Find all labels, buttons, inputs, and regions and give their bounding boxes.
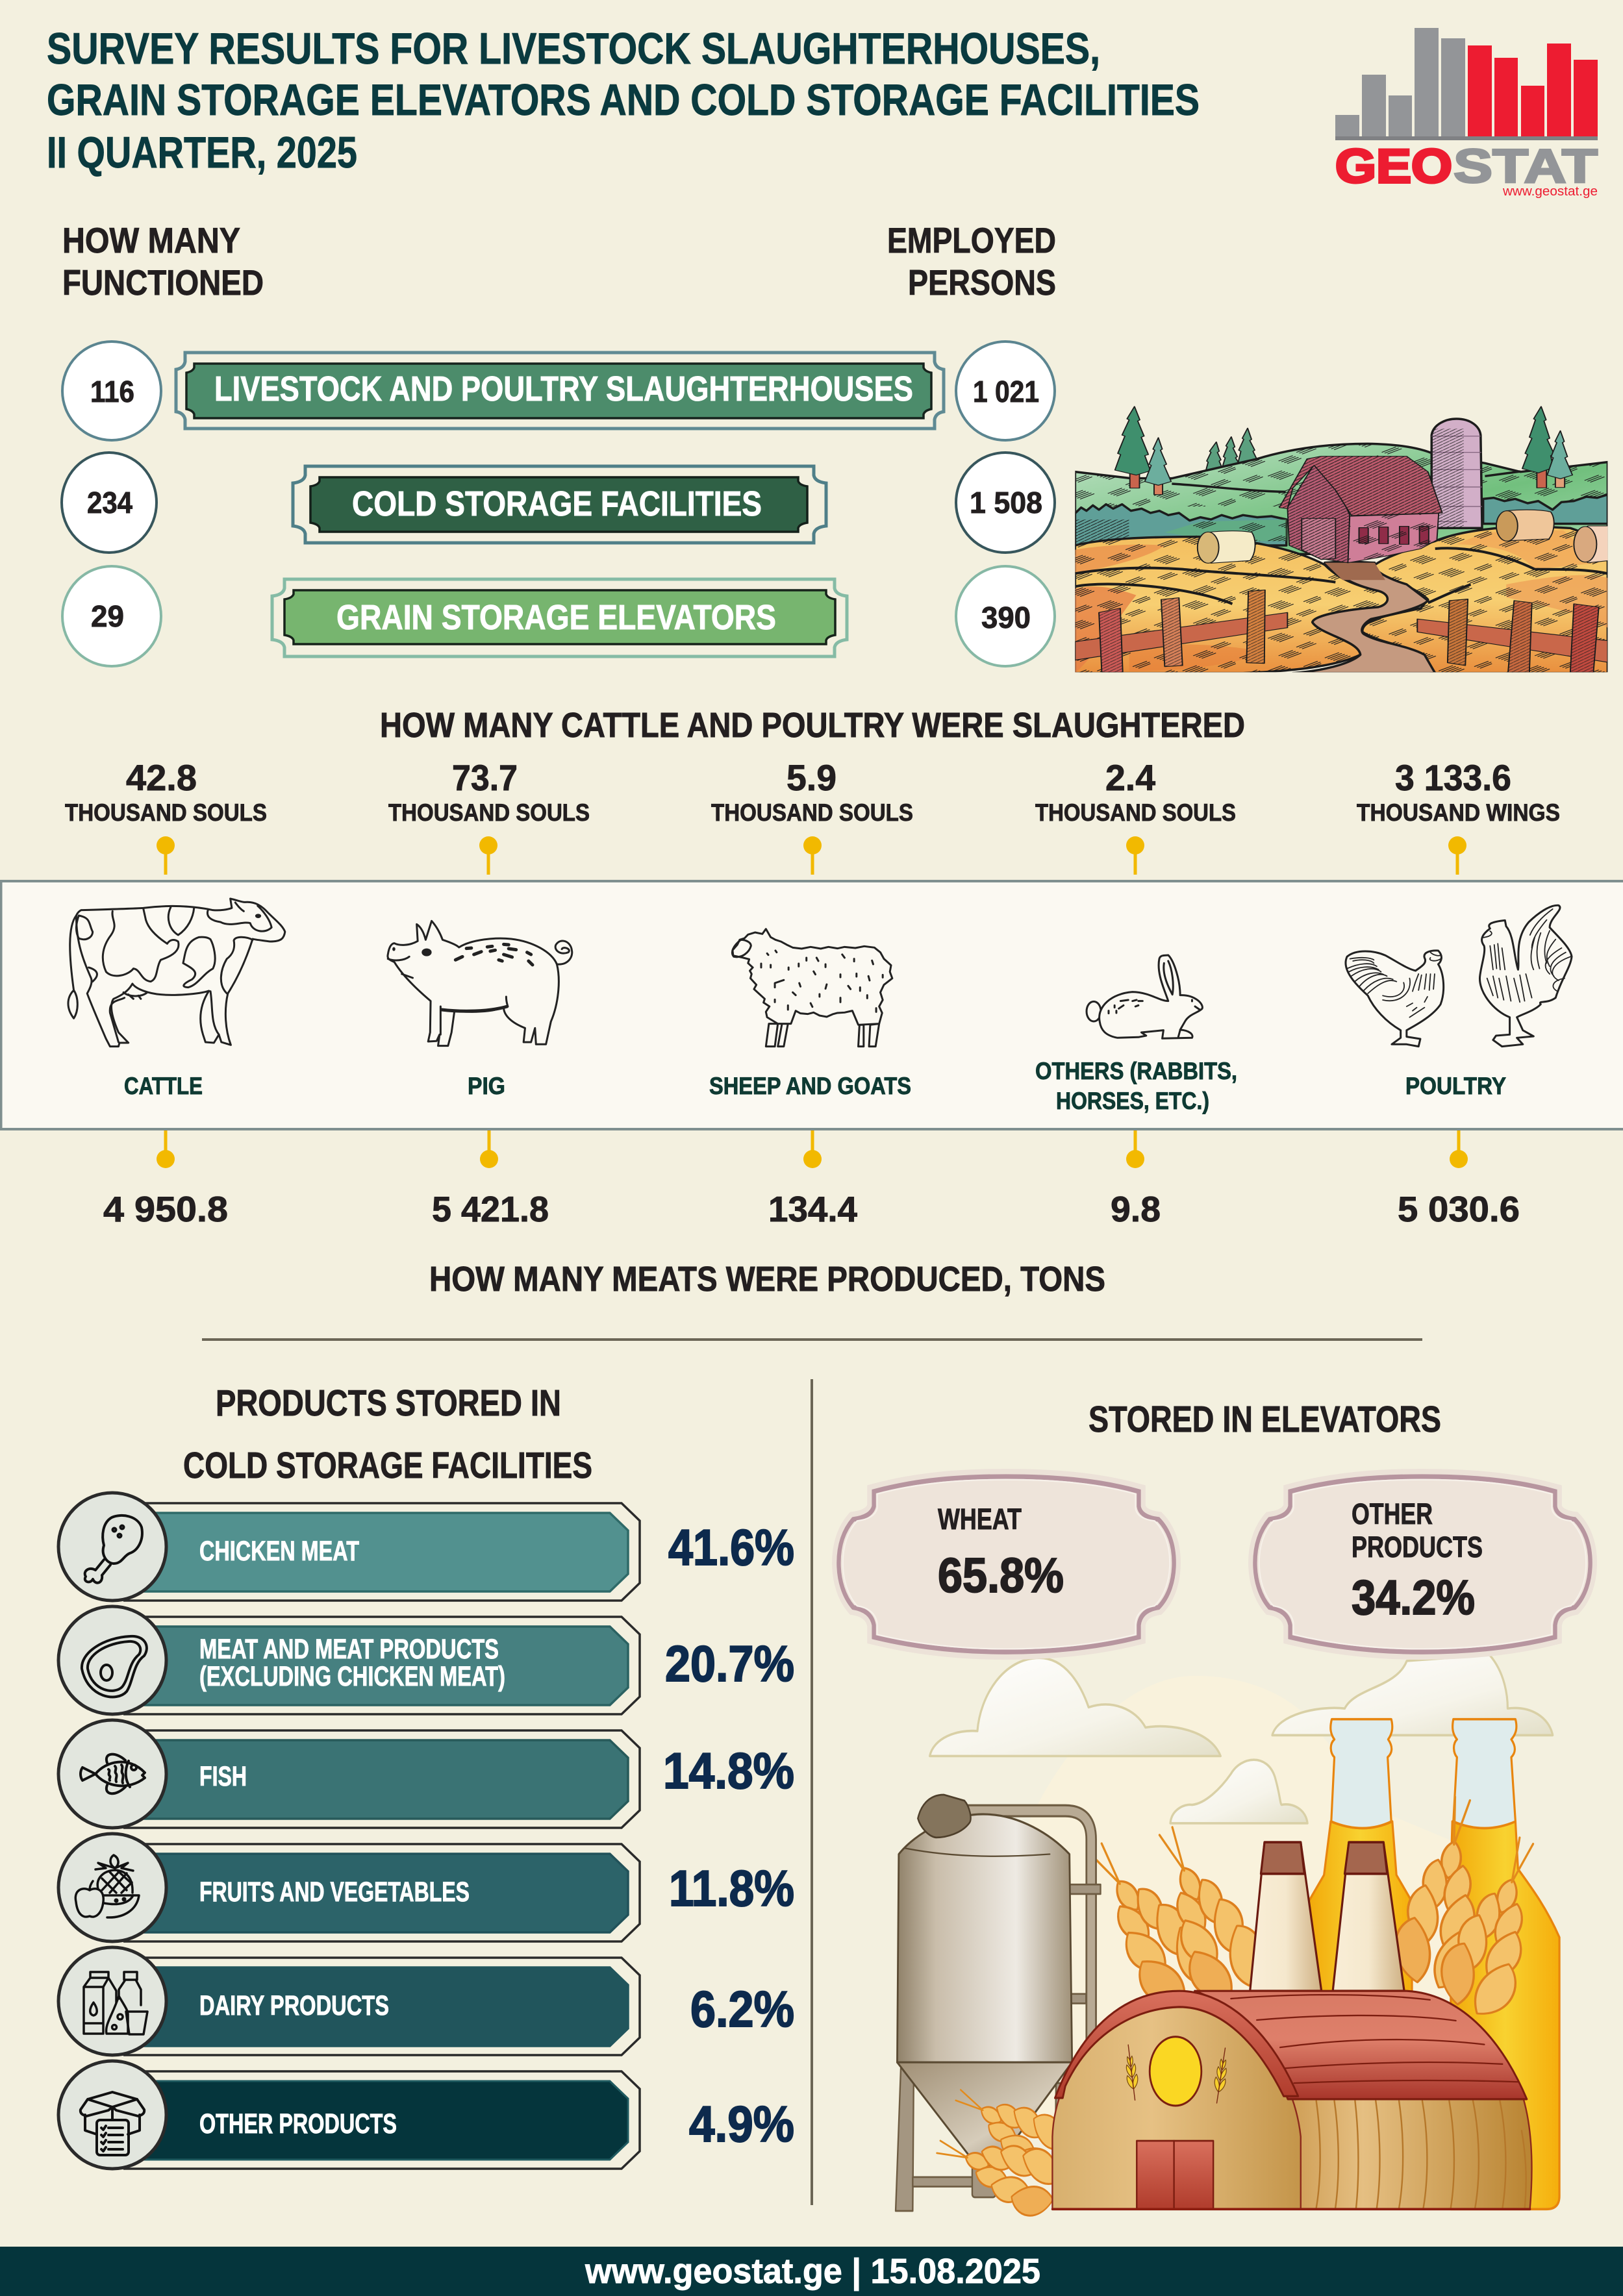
heading: how many functioned: FUNCTIONED bbox=[62, 262, 264, 303]
row: fish: 14.8% bbox=[663, 1742, 794, 1799]
heading: products stored in cold storage: COLD STORAGE FACILITIES bbox=[183, 1445, 592, 1486]
badge: wheat 65.8%: WHEAT bbox=[938, 1503, 1022, 1536]
value: cattle slaughtered: THOUSAND SOULS bbox=[65, 799, 267, 826]
value: pig slaughtered: THOUSAND SOULS bbox=[388, 799, 590, 826]
values: tons of meat bbox=[103, 1189, 1520, 1229]
row: chicken meat: 41.6% bbox=[668, 1519, 794, 1576]
logo: Geostat: STAT bbox=[1453, 140, 1598, 193]
banner: slaughterhouses bbox=[176, 353, 944, 429]
circle: 116 functioned: 116 bbox=[90, 375, 134, 408]
logo: Geostat bbox=[1335, 28, 1598, 199]
footer: www.geostat.ge | 15.08.2025 bbox=[585, 2252, 1040, 2291]
circle: 1 508 employed bbox=[956, 453, 1055, 553]
label: others: OTHERS (RABBITS, bbox=[1035, 1058, 1237, 1084]
banner: grain elevators bbox=[272, 579, 847, 656]
hills green bbox=[1075, 443, 1607, 554]
pins: top markers bbox=[157, 836, 1466, 875]
row: other products: OTHER PRODUCTS bbox=[199, 2108, 397, 2140]
heading: how many functioned bbox=[62, 220, 264, 303]
row: meat and meat products: MEAT AND MEAT PRODUCTS bbox=[199, 1634, 499, 1665]
row: meat and meat products: 20.7% bbox=[665, 1635, 794, 1692]
icon: dairy bbox=[84, 1972, 147, 2034]
value: cattle slaughtered bbox=[65, 757, 267, 826]
logo: Geostat: www.geostat.ge bbox=[1502, 184, 1598, 199]
heading: employed persons: PERSONS bbox=[908, 262, 1056, 303]
value: poultry slaughtered: THOUSAND WINGS bbox=[1357, 799, 1560, 826]
panel: animals band bbox=[1, 881, 1623, 1129]
badge: wheat 65.8% bbox=[838, 1477, 1174, 1652]
heading: cattle and poultry slaughtered: HOW MANY CATTLE AND POULTRY WERE SLAUGHTERED bbox=[380, 706, 1245, 745]
value: sheep and goats slaughtered: 5.9 bbox=[786, 757, 837, 798]
badge: wheat 65.8%: 65.8% bbox=[938, 1548, 1064, 1603]
circle: 234 functioned: 234 bbox=[87, 486, 132, 519]
silo bbox=[1431, 419, 1482, 528]
heading: meats produced: HOW MANY MEATS WERE PRODUCED, TONS bbox=[429, 1260, 1105, 1299]
barn bbox=[1279, 456, 1442, 563]
label: others: HORSES, ETC.) bbox=[1056, 1088, 1209, 1114]
hay bales bbox=[1198, 510, 1609, 563]
badge: other products 34.2% bbox=[1255, 1477, 1591, 1652]
circle: 29 functioned: 29 bbox=[91, 599, 124, 633]
heading: products stored in cold storage bbox=[183, 1382, 592, 1486]
row: other products: 4.9% bbox=[689, 2095, 794, 2152]
illustration: silo, bottles, wheat and barn bbox=[896, 1655, 1561, 2223]
circle: 1 508 employed: 1 508 bbox=[970, 486, 1042, 519]
circle: 116 functioned bbox=[62, 342, 161, 440]
value: sheep and goats slaughtered: THOUSAND SOULS bbox=[711, 799, 913, 826]
trees front bbox=[1115, 406, 1572, 495]
road bbox=[1293, 562, 1435, 673]
icon: sheep bbox=[732, 929, 892, 1047]
icon: fruits bbox=[75, 1855, 139, 1917]
circle: 1 021 employed: 1 021 bbox=[973, 375, 1039, 408]
circle: 234 functioned bbox=[62, 453, 157, 553]
banner: slaughterhouses: LIVESTOCK AND POULTRY SLAUGHTERHOUSES bbox=[214, 369, 913, 408]
value: cattle slaughtered: 42.8 bbox=[126, 757, 197, 798]
label: others bbox=[1035, 1058, 1237, 1114]
heading: employed persons bbox=[887, 220, 1056, 303]
pipe bbox=[967, 1811, 1091, 2047]
banner: cold storage bbox=[293, 466, 826, 543]
row: chicken meat: CHICKEN MEAT bbox=[199, 1536, 359, 1567]
logo: Geostat: GEO bbox=[1335, 140, 1452, 193]
row: dairy products bbox=[58, 1947, 794, 2055]
silo legs bbox=[896, 2068, 1065, 2211]
heading: how many functioned: HOW MANY bbox=[62, 220, 240, 260]
panel: cold storage products bbox=[58, 1493, 794, 2169]
panel: meat produced bbox=[103, 1130, 1520, 1299]
value: poultry slaughtered bbox=[1357, 757, 1560, 826]
trees behind hill bbox=[1205, 428, 1257, 471]
heading: products stored in cold storage: PRODUCTS STORED IN bbox=[216, 1382, 561, 1424]
icon: hen and rooster bbox=[1346, 905, 1572, 1047]
barn bbox=[1290, 2098, 1532, 2209]
title: SURVEY RESULTS FOR LIVESTOCK SLAUGHTERHOUSES, bbox=[47, 24, 1100, 73]
circle: 1 021 employed bbox=[956, 342, 1055, 440]
label: pig: PIG bbox=[468, 1073, 505, 1099]
pins: bottom markers bbox=[157, 1130, 1468, 1168]
chimneys bbox=[1250, 1842, 1404, 1991]
circle: 29 functioned bbox=[62, 566, 161, 666]
panel: slaughter counts bbox=[65, 757, 1560, 875]
value: poultry slaughtered: 3 133.6 bbox=[1395, 757, 1511, 798]
circle: 390 employed bbox=[956, 566, 1055, 666]
bottles bbox=[1309, 1719, 1559, 2209]
value: others slaughtered: THOUSAND SOULS bbox=[1035, 799, 1236, 826]
icon: cow bbox=[68, 899, 285, 1047]
icon: fish bbox=[81, 1754, 145, 1793]
row: fruits and vegetables bbox=[58, 1834, 794, 1941]
icon: rabbit bbox=[1087, 955, 1202, 1038]
row: meat and meat products bbox=[58, 1606, 794, 1714]
values: tons of meat: 9.8 bbox=[1111, 1189, 1161, 1229]
fence bbox=[1075, 590, 1607, 672]
values: tons of meat: 5 421.8 bbox=[432, 1189, 549, 1229]
heading: stored in elevators: STORED IN ELEVATORS bbox=[1088, 1399, 1441, 1440]
icon: pig bbox=[388, 921, 572, 1046]
values: tons of meat: 134.4 bbox=[768, 1189, 857, 1229]
badge: other products 34.2%: OTHER bbox=[1352, 1497, 1433, 1530]
footer bbox=[0, 2247, 1623, 2296]
banner: grain elevators: GRAIN STORAGE ELEVATORS bbox=[336, 598, 776, 637]
low wheat bbox=[946, 2067, 1072, 2184]
row: other products bbox=[58, 2061, 794, 2169]
row: meat and meat products: (EXCLUDING CHICKEN MEAT) bbox=[199, 1661, 505, 1692]
row: dairy products: 6.2% bbox=[690, 1980, 794, 2038]
badge: other products 34.2%: PRODUCTS bbox=[1352, 1530, 1483, 1564]
badge: other products 34.2%: 34.2% bbox=[1352, 1570, 1475, 1625]
value: others slaughtered: 2.4 bbox=[1105, 757, 1155, 798]
heading: employed persons: EMPLOYED bbox=[887, 220, 1056, 260]
icon: chicken leg bbox=[85, 1516, 142, 1583]
illustration: farm landscape bbox=[1075, 406, 1609, 673]
wheat ears behind barn bbox=[1066, 1822, 1223, 2018]
value: others slaughtered bbox=[1035, 757, 1236, 826]
values: tons of meat: 4 950.8 bbox=[103, 1189, 228, 1229]
silo bbox=[897, 1814, 1072, 2062]
row: fish bbox=[58, 1720, 794, 1828]
title bbox=[47, 24, 1200, 177]
label: cattle: CATTLE bbox=[124, 1073, 203, 1099]
row: dairy products: DAIRY PRODUCTS bbox=[199, 1990, 389, 2021]
row: chicken meat bbox=[58, 1493, 794, 1601]
banner: cold storage: COLD STORAGE FACILITIES bbox=[352, 484, 762, 523]
label: poultry: POULTRY bbox=[1405, 1073, 1506, 1099]
value: pig slaughtered bbox=[388, 757, 590, 826]
title: II QUARTER, 2025 bbox=[47, 128, 357, 177]
hills yellow bbox=[1363, 526, 1607, 673]
row: fruits and vegetables: 11.8% bbox=[669, 1860, 794, 1917]
circle: 390 employed: 390 bbox=[981, 601, 1031, 634]
label: sheep and goats: SHEEP AND GOATS bbox=[709, 1073, 911, 1099]
panel: facility rows bbox=[62, 342, 1055, 666]
value: sheep and goats slaughtered bbox=[711, 757, 913, 826]
value: pig slaughtered: 73.7 bbox=[452, 757, 518, 798]
title: GRAIN STORAGE ELEVATORS AND COLD STORAGE FACILITIES bbox=[47, 75, 1200, 125]
icon: steak bbox=[82, 1636, 147, 1697]
row: fruits and vegetables: FRUITS AND VEGETABLES bbox=[199, 1877, 470, 1908]
clouds bbox=[930, 1655, 1553, 1823]
values: tons of meat: 5 030.6 bbox=[1398, 1189, 1520, 1229]
row: fish: FISH bbox=[199, 1761, 247, 1792]
icon: box and checklist bbox=[81, 2092, 144, 2155]
